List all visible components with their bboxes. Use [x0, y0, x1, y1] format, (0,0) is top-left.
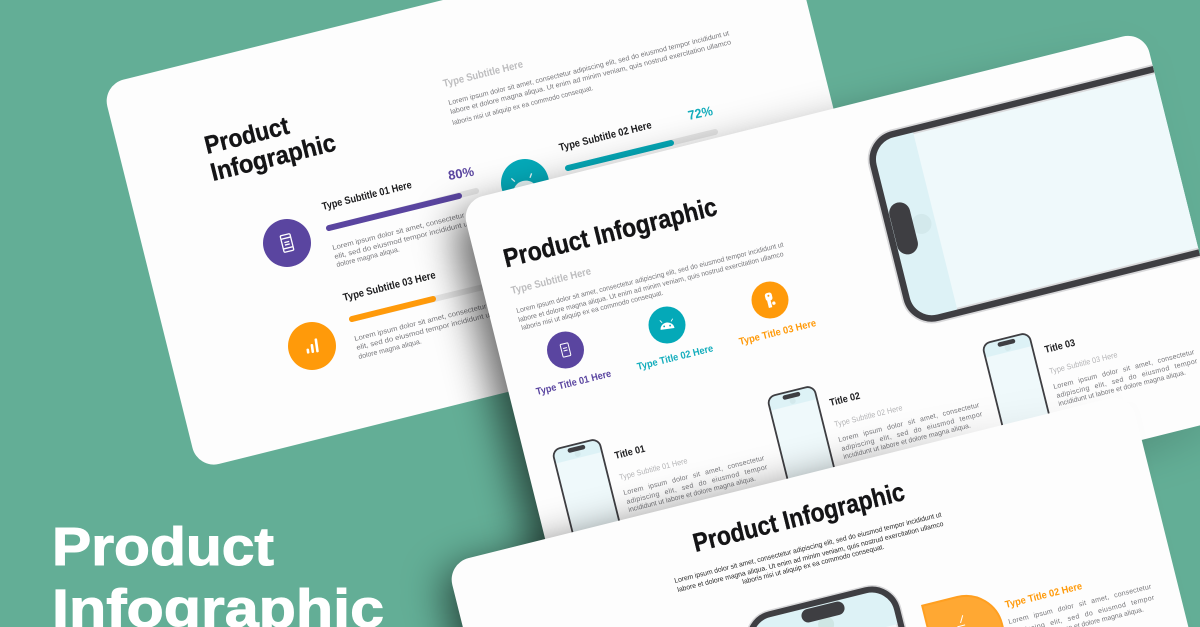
phone: small device 01 with text: incididunt ut labore et dolore magna aliqua. — [628, 475, 757, 514]
text block: card 2 subtitle and intro: labore et dolore magna aliqua. Ut enim ad minim veniam, quis nostrud exercitation ullamco — [518, 251, 784, 324]
heading: card 2 title: Product Infographic — [500, 191, 720, 273]
bar: subtitle 01 progress: 80% — [447, 164, 476, 183]
phone: card 3 device — [748, 585, 906, 627]
phone: small device 01 with text: Title 01 — [614, 444, 647, 462]
bar: subtitle 01 progress: Type Subtitle 01 Here — [321, 179, 413, 213]
icon: teal android circle — [501, 159, 549, 207]
bar: subtitle 01 progress: elit, sed do eiusmod tempor incididunt ut labore et — [334, 213, 502, 261]
phone: small device 02 with text: incididunt ut labore et dolore magna aliqua. — [843, 422, 972, 461]
bar: subtitle 03 progress: elit, sed do eiusmod tempor incididunt ut labore et — [356, 304, 524, 352]
text block: card 1 subtitle and intro: laboris nisi ut aliquip ex ea commodo consequat. — [452, 85, 594, 127]
phone: small device 01 with text: adipiscing elit, sed do eiusmod tempor — [626, 464, 769, 506]
icon: purple phone with label — [535, 332, 613, 398]
text block: card 3 intro: labore et dolore magna aliqua. Ut enim ad minim veniam, quis nostrud exercitation ullamco — [677, 521, 944, 594]
text block: card 1 subtitle and intro: Lorem ipsum dolor sit amet, consectetur adipiscing elit, sed do eiusmod tempor incididunt ut — [448, 30, 730, 107]
bar: subtitle 02 progress — [558, 103, 715, 168]
icon: orange rounded tab — [922, 588, 1019, 627]
phone: small device 02 with text — [767, 385, 984, 523]
phone: small device 01 with text: Lorem ipsum dolor sit amet, consectetur — [623, 455, 766, 497]
bar: subtitle 03 progress: dolore magna aliqua. — [358, 338, 423, 361]
text block: card 3 intro: laboris nisi ut aliquip ex ea commodo consequat. — [742, 544, 885, 586]
phone: small device 03 with text: Lorem ipsum dolor sit amet, consectetur — [1053, 349, 1196, 391]
icon: purple phone with label: Type Title 01 Here — [535, 369, 613, 398]
icon: orange key with label: Type Title 03 Here — [738, 318, 818, 348]
bar: subtitle 01 progress — [321, 164, 502, 269]
text block: type title 02: Type Title 02 Here — [1004, 581, 1084, 611]
heading: card 3 title: Product Infographic — [690, 476, 908, 558]
phone: small device 01 with text — [552, 438, 769, 576]
text block: card 1 subtitle and intro: Type Subtitle Here — [442, 58, 524, 90]
text block: type title 02: Lorem ipsum dolor sit amet, consectetur — [1008, 583, 1153, 626]
icon: orange key with label — [738, 282, 818, 348]
heading: main title — [52, 517, 384, 627]
phone: small device 02 with text: adipiscing elit, sed do eiusmod tempor — [841, 411, 984, 453]
phone: small device 02 with text: Lorem ipsum dolor sit amet, consectetur — [838, 402, 981, 444]
phone: small device 03 with text: adipiscing elit, sed do eiusmod tempor — [1056, 358, 1199, 400]
phone: small device 02 with text: Title 02 — [829, 391, 862, 409]
phone: small device 01 with text: Type Subtitle 01 Here — [618, 456, 689, 482]
icon: teal android with label: Type Title 02 Here — [636, 343, 715, 373]
panel: card 1 progress bars — [102, 0, 881, 469]
bar: subtitle 03 progress: Lorem ipsum dolor sit amet, consectetur adipiscing — [354, 295, 522, 343]
icon: purple phone circle — [263, 219, 311, 267]
bar: subtitle 02 progress: Type Subtitle 02 Here — [558, 119, 653, 154]
panel: card 2 product overview — [428, 36, 1200, 548]
heading: card 1 title: Product — [202, 112, 292, 160]
heading: main title: Product — [52, 517, 274, 577]
text block: card 2 subtitle and intro: Type Subtitle Here — [510, 265, 592, 297]
text block: card 2 subtitle and intro: laboris nisi ut aliquip ex ea commodo consequat. — [521, 290, 664, 332]
phone: small device 03 with text: Type Subtitle 03 Here — [1048, 350, 1119, 376]
icon: teal android with label — [636, 306, 715, 373]
bar: subtitle 01 progress: dolore magna aliqua. — [336, 246, 401, 269]
icon: orange chart circle — [288, 322, 336, 370]
text block: card 3 intro: Lorem ipsum dolor sit amet, consectetur adipiscing elit, sed do eiusmod tempor incididunt ut — [674, 512, 942, 585]
phone: small device 03 with text — [982, 332, 1199, 470]
text block: card 2 subtitle and intro: Lorem ipsum dolor sit amet, consectetur adipiscing elit, sed do eiusmod tempor incididunt ut — [516, 242, 784, 315]
bar: subtitle 01 progress: Lorem ipsum dolor sit amet, consectetur adipiscing — [332, 204, 500, 252]
heading: card 1 title: Infographic — [208, 129, 339, 187]
phone: small device 02 with text: Type Subtitle 02 Here — [833, 403, 904, 429]
panel: card 3 product detail — [439, 393, 1200, 627]
phone: big landscape device — [868, 64, 1200, 324]
bar: subtitle 03 progress: Type Subtitle 03 Here — [342, 269, 437, 304]
text block: card 1 subtitle and intro: labore et dolore magna aliqua. Ut enim ad minim veniam, quis nostrud exercitation ullamco — [450, 39, 732, 116]
bar: subtitle 03 progress — [342, 269, 524, 361]
phone: small device 03 with text: incididunt ut labore et dolore magna aliqua. — [1058, 369, 1187, 408]
phone: small device 03 with text: Title 03 — [1044, 338, 1077, 356]
bar: subtitle 02 progress: 72% — [687, 103, 714, 123]
